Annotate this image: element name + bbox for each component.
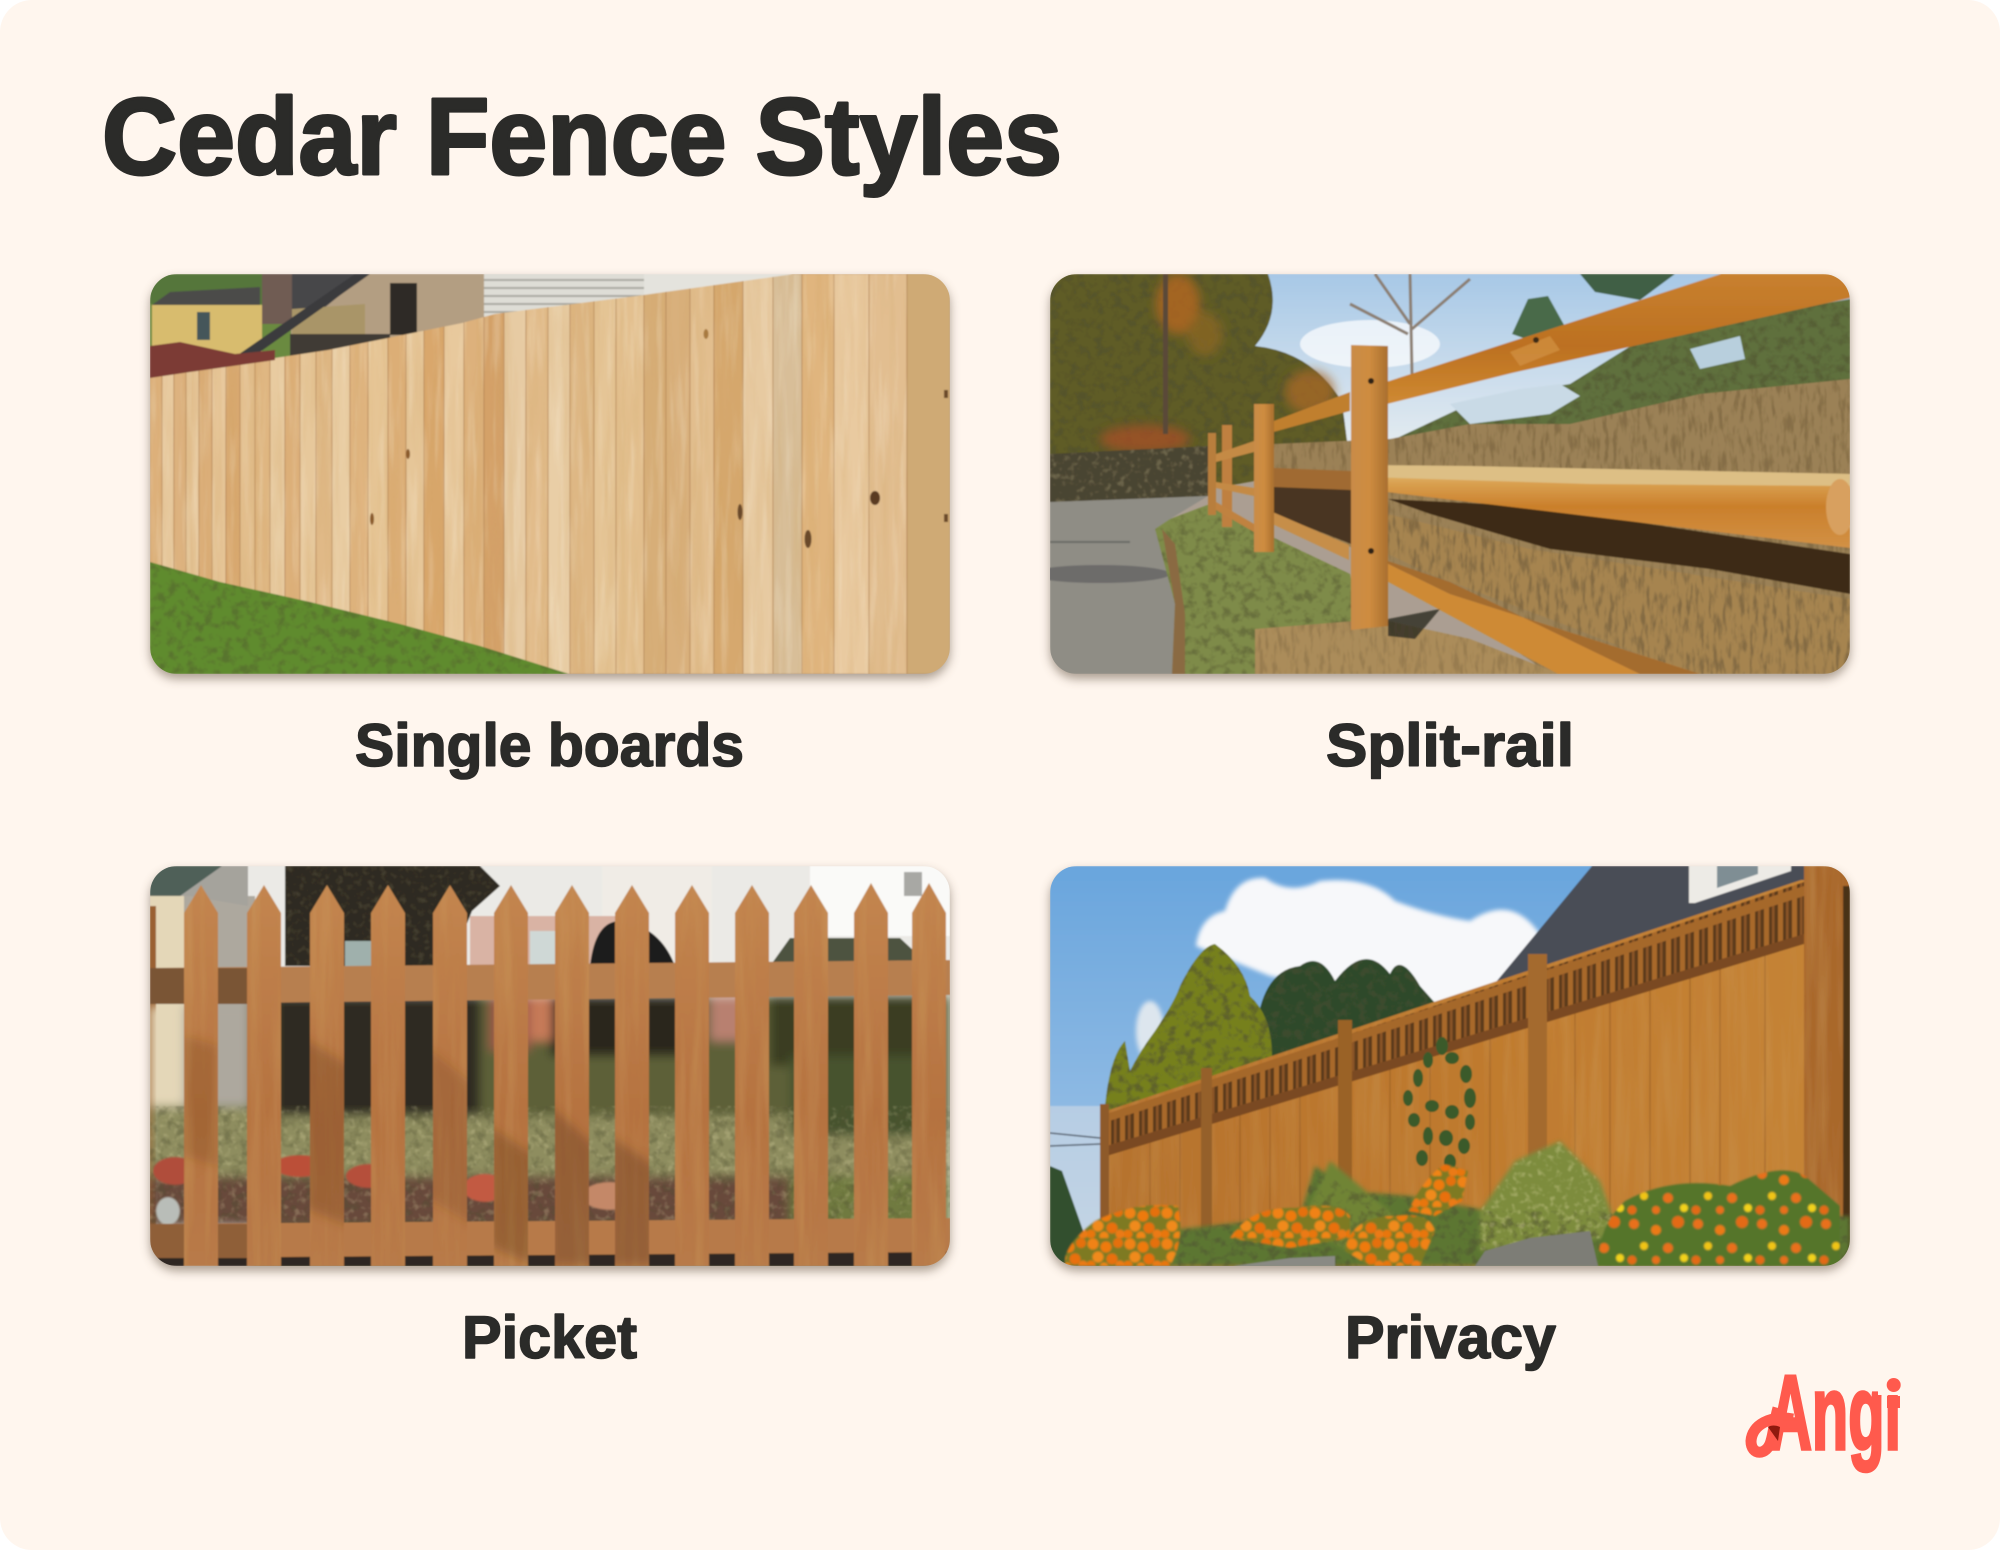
label: Split-rail: Split-rail <box>1326 712 1574 779</box>
far posts and rails <box>1208 433 1216 515</box>
panel: single boards <box>150 274 950 779</box>
lattice band <box>1100 882 1804 1148</box>
wall <box>1100 880 1850 1266</box>
rails <box>150 960 950 1004</box>
bare tree <box>1350 274 1470 374</box>
left small tree <box>1050 1166 1100 1266</box>
main post <box>1351 345 1388 630</box>
label: Picket: Picket <box>462 1304 637 1371</box>
pickets <box>184 885 218 1266</box>
photo: split-rail fence <box>1030 274 1854 679</box>
rock <box>1475 1231 1598 1266</box>
title: Cedar Fence Styles <box>102 76 1062 198</box>
left house <box>183 895 256 1012</box>
vine <box>1403 1037 1476 1170</box>
panel: split-rail <box>1030 274 1854 779</box>
photo: privacy fence <box>1050 866 1850 1271</box>
flowers <box>1065 1164 1840 1266</box>
posts <box>1100 1104 1109 1266</box>
tree <box>285 866 500 966</box>
panel: picket <box>150 866 950 1371</box>
green verge <box>1155 504 1370 674</box>
trees <box>1258 958 1435 1057</box>
label: Privacy: Privacy <box>1345 1304 1557 1371</box>
yard <box>150 996 950 1266</box>
panel: privacy <box>1050 866 1850 1371</box>
logo: Angi <box>1751 1354 1908 1472</box>
dry grass <box>1274 379 1850 674</box>
photo: single board fence <box>150 274 950 679</box>
plants <box>1080 1141 1850 1266</box>
main rails <box>1383 274 1850 405</box>
roof and dormer <box>1496 866 1805 986</box>
trees <box>1050 274 1350 502</box>
shade on pickets <box>184 904 940 1266</box>
label: Single boards: Single boards <box>355 712 744 779</box>
photo: picket fence <box>150 866 950 1271</box>
path <box>1050 496 1208 674</box>
logo: Angi: Angi <box>1769 1354 1901 1472</box>
pines <box>1398 298 1850 438</box>
back houses <box>469 915 616 966</box>
